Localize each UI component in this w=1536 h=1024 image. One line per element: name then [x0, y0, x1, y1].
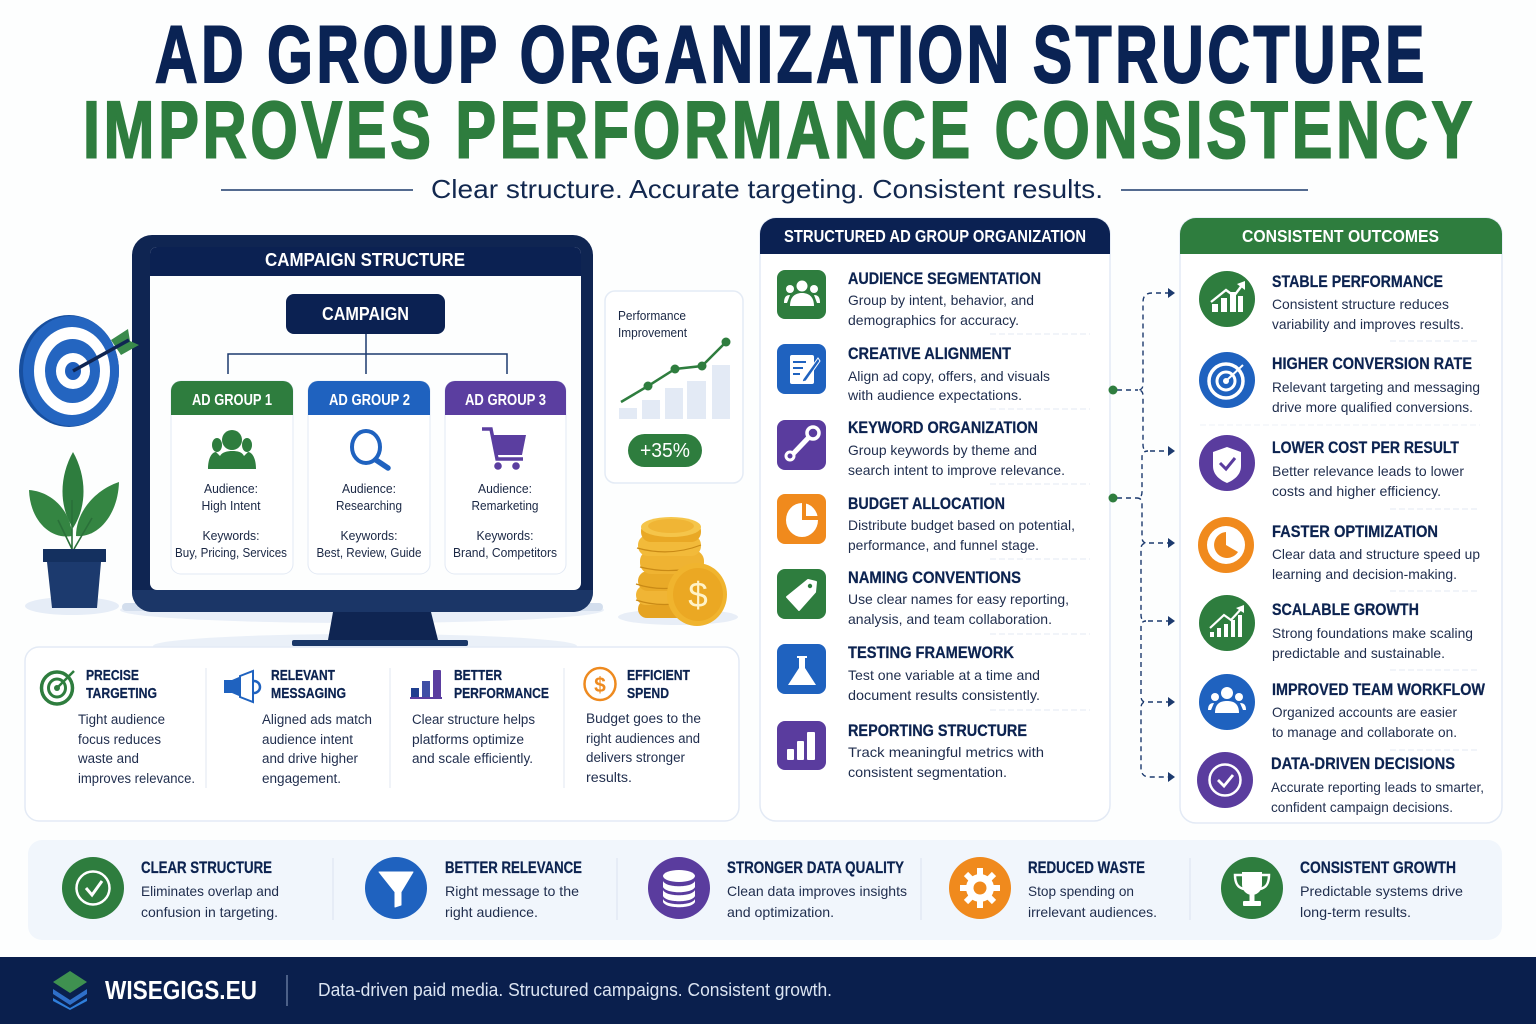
- benefit: better performance: PERFORMANCE: [454, 686, 549, 702]
- item: naming conventions: [777, 568, 1069, 627]
- icon: layered logo: [53, 971, 87, 1010]
- panel: bottom summary strip: [28, 840, 1502, 940]
- outcome: faster optimization: learning and decision-making.: [1272, 566, 1457, 582]
- icon: pie chart: [777, 494, 826, 544]
- benefit: better performance: and scale efficiently.: [412, 751, 533, 766]
- card: ad group 2: Best, Review, Guide: [316, 546, 422, 560]
- item: budget allocation: Distribute budget based on potential,: [848, 517, 1075, 533]
- icon: target: [1199, 352, 1255, 408]
- item: budget allocation: [777, 494, 1075, 553]
- summary: clear structure: Eliminates overlap and: [141, 883, 279, 899]
- benefit: efficient spend: right audiences and: [586, 731, 700, 746]
- card: ad group 1: Audience:: [204, 482, 258, 496]
- summary: stronger data quality: Clean data improves insights: [727, 883, 907, 899]
- benefit: precise targeting: Tight audience: [78, 712, 165, 727]
- summary: better relevance: Right message to the: [445, 883, 579, 899]
- card: ad group 3: [445, 381, 566, 574]
- outcome: higher conversion rate: [1199, 352, 1480, 415]
- panel: campaign structure: [150, 247, 581, 574]
- icon: growth chart: [1199, 595, 1255, 651]
- card: ad group 1: Keywords:: [202, 529, 260, 543]
- icon: clock: [1198, 517, 1254, 573]
- benefit: precise targeting: [42, 668, 195, 786]
- badge: +35%: +35%: [640, 440, 690, 462]
- benefit: relevant messaging: Aligned ads match: [262, 712, 372, 727]
- card: ad group 2: Audience:: [342, 482, 396, 496]
- benefit: relevant messaging: MESSAGING: [271, 686, 346, 702]
- icon: bars: [410, 670, 442, 699]
- outcome: lower cost per result: costs and higher efficiency.: [1272, 483, 1441, 499]
- summary: stronger data quality: and optimization.: [727, 904, 834, 920]
- benefit: precise targeting: focus reduces: [78, 732, 161, 747]
- icon: magnifier: [352, 431, 388, 468]
- outcome: scalable growth: SCALABLE GROWTH: [1272, 600, 1419, 619]
- tagline: Data-driven paid media. Structured campaigns. Consistent growth.: [318, 980, 832, 1000]
- icon: target: [42, 671, 74, 704]
- item: creative alignment: [777, 344, 1050, 403]
- summary: clear structure: confusion in targeting.: [141, 904, 278, 920]
- panel header: CONSISTENT OUTCOMES: [1242, 226, 1439, 246]
- screen header: CAMPAIGN STRUCTURE: [265, 250, 465, 270]
- item: keyword organization: KEYWORD ORGANIZATION: [848, 418, 1038, 437]
- benefit: relevant messaging: [224, 668, 372, 786]
- icon: people: [777, 270, 826, 319]
- campaign box: [286, 294, 445, 334]
- summary: clear structure: CLEAR STRUCTURE: [141, 858, 272, 877]
- item: keyword organization: Group keywords by theme and: [848, 442, 1037, 458]
- brand name: WISEGIGS.EU: [105, 975, 257, 1005]
- benefit: relevant messaging: audience intent: [262, 732, 353, 747]
- outcome: stable performance: STABLE PERFORMANCE: [1272, 272, 1443, 291]
- item: keyword organization: search intent to improve relevance.: [848, 462, 1065, 478]
- title: [83, 10, 1476, 176]
- benefit: precise targeting: waste and: [77, 751, 139, 766]
- card: ad group 1: [171, 381, 293, 574]
- subtitle: Clear structure. Accurate targeting. Consistent results.: [431, 174, 1103, 204]
- outcome: scalable growth: [1199, 595, 1473, 661]
- icon: key: [777, 420, 826, 470]
- outcome: higher conversion rate: HIGHER CONVERSION RATE: [1272, 354, 1472, 373]
- item: testing framework: [777, 643, 1040, 703]
- item: keyword organization: [777, 418, 1065, 478]
- icon: team: [1199, 674, 1255, 730]
- icon: gear: [949, 857, 1011, 919]
- panel header: STRUCTURED AD GROUP ORGANIZATION: [784, 226, 1086, 246]
- benefit: efficient spend: Budget goes to the: [586, 711, 701, 726]
- benefit: efficient spend: results.: [586, 770, 632, 785]
- summary: reduced waste: [949, 857, 1157, 920]
- outcome: scalable growth: predictable and sustainable.: [1272, 645, 1445, 661]
- bar and line chart: [619, 338, 730, 419]
- panel: structured ad group organization: [760, 218, 1110, 821]
- icon: coin stack: [618, 517, 738, 626]
- icon: tag: [777, 569, 826, 619]
- card: ad group 2: AD GROUP 2: [329, 392, 410, 409]
- item: testing framework: document results consistently.: [848, 687, 1040, 703]
- panel header: [1180, 218, 1502, 254]
- card: ad group 2: [308, 381, 430, 574]
- icon: funnel: [365, 857, 427, 919]
- summary: consistent growth: CONSISTENT GROWTH: [1300, 858, 1456, 877]
- benefit: better performance: [410, 668, 549, 766]
- card: ad group 3: Audience:: [478, 482, 532, 496]
- campaign box: CAMPAIGN: [322, 304, 409, 324]
- outcome: faster optimization: [1198, 517, 1480, 582]
- outcome: stable performance: [1199, 271, 1464, 332]
- item: audience segmentation: demographics for accuracy.: [848, 312, 1019, 328]
- summary: reduced waste: Stop spending on: [1028, 883, 1134, 899]
- panel: consistent outcomes: [1180, 218, 1502, 823]
- summary: better relevance: right audience.: [445, 904, 538, 920]
- icon: cart: [482, 429, 526, 470]
- outcome: lower cost per result: [1199, 435, 1464, 499]
- outcome: improved team workflow: to manage and collaborate on.: [1272, 724, 1457, 740]
- item: naming conventions: NAMING CONVENTIONS: [848, 568, 1021, 587]
- summary: better relevance: [365, 857, 582, 920]
- item: audience segmentation: Group by intent, behavior, and: [848, 292, 1034, 308]
- item: testing framework: TESTING FRAMEWORK: [848, 643, 1015, 662]
- outcome: stable performance: Consistent structure reduces: [1272, 296, 1449, 312]
- outcome: data-driven decisions: DATA-DRIVEN DECISIONS: [1271, 754, 1455, 773]
- benefit: better performance: Clear structure helps: [412, 712, 535, 727]
- item: naming conventions: Use clear names for easy reporting,: [848, 591, 1069, 607]
- item: audience segmentation: AUDIENCE SEGMENTATION: [848, 269, 1041, 288]
- item: creative alignment: with audience expectations.: [847, 387, 1022, 403]
- outcome: improved team workflow: IMPROVED TEAM WORKFLOW: [1272, 680, 1486, 699]
- panel: performance improvement: [605, 291, 743, 483]
- card: ad group 3: Brand, Competitors: [453, 546, 557, 560]
- panel: benefits: [25, 647, 739, 821]
- outcome: scalable growth: Strong foundations make scaling: [1272, 625, 1473, 641]
- item: creative alignment: Align ad copy, offers, and visuals: [848, 368, 1050, 384]
- icon: rising chart: [1199, 271, 1255, 327]
- icon: dollar: $: [594, 674, 606, 697]
- footer: [0, 957, 1536, 1024]
- badge: +35%: [628, 434, 702, 467]
- icon: monitor: [120, 235, 604, 658]
- benefit: better performance: platforms optimize: [412, 732, 524, 747]
- summary: better relevance: BETTER RELEVANCE: [445, 858, 582, 877]
- screen header: [150, 247, 581, 276]
- item: naming conventions: analysis, and team collaboration.: [848, 611, 1052, 627]
- card: ad group 3: AD GROUP 3: [465, 392, 546, 409]
- summary: reduced waste: irrelevant audiences.: [1028, 904, 1157, 920]
- outcome: faster optimization: FASTER OPTIMIZATION: [1272, 522, 1438, 541]
- benefit: precise targeting: PRECISE: [86, 668, 139, 684]
- panel: performance improvement: Improvement: [618, 326, 687, 340]
- summary: consistent growth: long-term results.: [1300, 904, 1411, 920]
- benefit: relevant messaging: RELEVANT: [271, 668, 335, 684]
- icon: document and pen: [777, 344, 826, 394]
- item: reporting structure: consistent segmentation.: [848, 764, 1007, 780]
- dashed connector arrows: [1108, 288, 1175, 782]
- item: reporting structure: REPORTING STRUCTURE: [848, 721, 1027, 740]
- outcome: stable performance: variability and improves results.: [1272, 316, 1464, 332]
- card: ad group 1: Buy, Pricing, Services: [175, 546, 287, 560]
- benefit: precise targeting: TARGETING: [86, 686, 157, 702]
- benefit: better performance: BETTER: [454, 668, 502, 684]
- icon: potted plant: [25, 452, 119, 615]
- summary: stronger data quality: [648, 857, 907, 920]
- card: ad group 3: Remarketing: [472, 499, 539, 513]
- card: ad group 1: High Intent: [202, 499, 261, 513]
- benefit: efficient spend: EFFICIENT: [627, 668, 690, 684]
- benefit: efficient spend: [584, 668, 701, 785]
- card: ad group 2: Researching: [336, 499, 402, 513]
- icon: megaphone: [224, 671, 260, 702]
- item: creative alignment: CREATIVE ALIGNMENT: [848, 344, 1012, 363]
- icon: check circle: [1197, 752, 1253, 808]
- outcome: higher conversion rate: Relevant targeting and messaging: [1272, 379, 1480, 395]
- outcome: lower cost per result: Better relevance leads to lower: [1272, 463, 1464, 479]
- item: reporting structure: Track meaningful metrics with: [848, 744, 1044, 760]
- outcome: data-driven decisions: confident campaign decisions.: [1271, 799, 1453, 815]
- outcome: higher conversion rate: drive more qualified conversions.: [1272, 399, 1473, 415]
- benefit: precise targeting: improves relevance.: [78, 771, 195, 786]
- outcome: faster optimization: Clear data and structure speed up: [1272, 546, 1480, 562]
- panel header: [760, 218, 1110, 254]
- outcome: lower cost per result: LOWER COST PER RESULT: [1272, 438, 1460, 457]
- summary: consistent growth: [1221, 857, 1463, 920]
- icon: trophy: [1221, 857, 1283, 919]
- summary: reduced waste: REDUCED WASTE: [1028, 858, 1145, 877]
- connector lines: [228, 334, 507, 374]
- item: budget allocation: BUDGET ALLOCATION: [848, 494, 1005, 513]
- summary: consistent growth: Predictable systems drive: [1300, 883, 1463, 899]
- icon: target with arrow: [19, 315, 139, 427]
- item: reporting structure: [777, 721, 1044, 780]
- item: audience segmentation: [777, 269, 1041, 328]
- summary: clear structure: [62, 857, 279, 920]
- outcome: improved team workflow: Organized accounts are easier: [1272, 704, 1457, 720]
- item: budget allocation: performance, and funnel stage.: [848, 537, 1039, 553]
- benefit: relevant messaging: engagement.: [262, 771, 341, 786]
- outcome: data-driven decisions: [1197, 752, 1484, 815]
- summary: stronger data quality: STRONGER DATA QUALITY: [727, 858, 905, 877]
- card: ad group 2: Keywords:: [340, 529, 398, 543]
- icon: database: [648, 857, 710, 919]
- icon: coin stack: $: [688, 576, 708, 615]
- card: ad group 3: Keywords:: [476, 529, 534, 543]
- icon: shield: [1199, 435, 1255, 491]
- panel: performance improvement: Performance: [618, 309, 686, 323]
- outcome: improved team workflow: [1199, 674, 1486, 740]
- icon: bars: [777, 721, 826, 770]
- benefit: efficient spend: SPEND: [627, 686, 669, 702]
- icon: check: [62, 857, 124, 919]
- outcome: data-driven decisions: Accurate reporting leads to smarter,: [1271, 779, 1484, 795]
- icon: flask: [777, 644, 826, 694]
- item: testing framework: Test one variable at a time and: [848, 667, 1040, 683]
- benefit: relevant messaging: and drive higher: [262, 751, 358, 766]
- card: ad group 1: AD GROUP 1: [192, 392, 272, 409]
- icon: audience: [208, 430, 256, 469]
- benefit: efficient spend: delivers stronger: [586, 750, 685, 765]
